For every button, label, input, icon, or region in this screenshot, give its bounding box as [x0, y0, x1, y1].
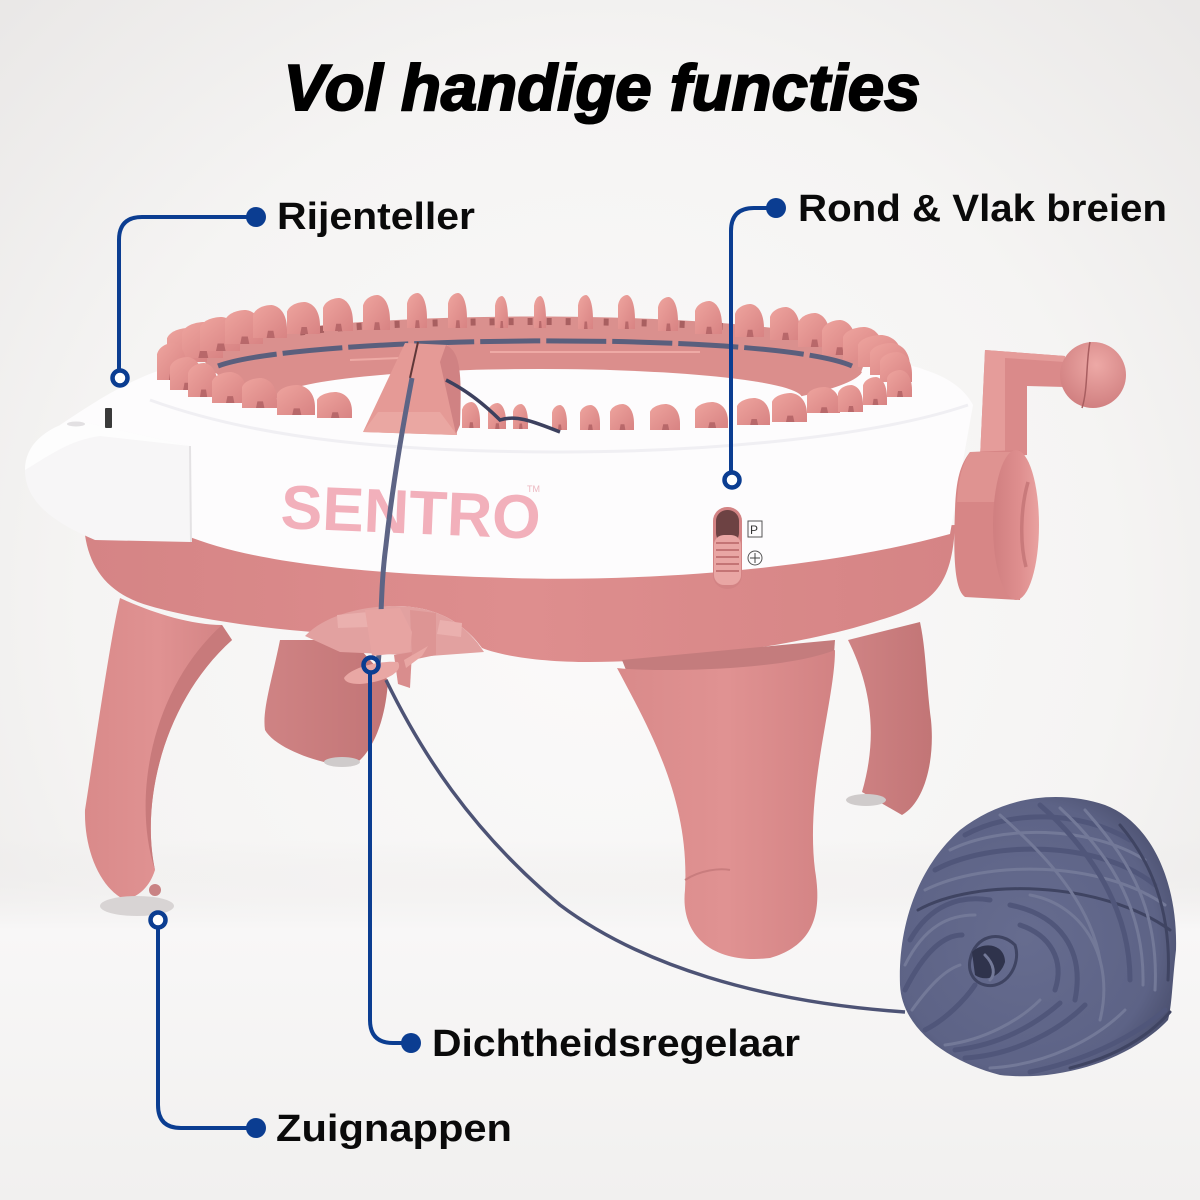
front row of pink needles — [157, 343, 912, 430]
callout: Dichtheidsregelaar: Dichtheidsregelaar — [432, 1023, 800, 1065]
callout: Zuignappen: Zuignappen — [276, 1108, 512, 1150]
yarn strand down the front — [378, 378, 412, 665]
back left leg — [264, 640, 388, 766]
back right leg — [848, 622, 932, 815]
back left suction cup — [324, 757, 360, 767]
callout: Rijenteller — [112, 196, 475, 386]
mode slider switch — [713, 507, 742, 589]
front right leg — [617, 640, 835, 959]
brand logo: TM — [527, 484, 540, 494]
callout: Zuignappen — [150, 912, 512, 1150]
pink machine base — [85, 525, 955, 662]
long yarn strand to the ball — [386, 680, 905, 1012]
tension regulator — [337, 608, 462, 688]
back right suction cup — [846, 794, 886, 806]
tension dial recess — [305, 606, 484, 656]
crank handle — [980, 342, 1126, 458]
white machine body — [60, 350, 973, 579]
callout: Rond & Vlak breien: Rond & Vlak breien — [798, 188, 1167, 230]
yarn guide cone — [363, 342, 461, 435]
back row of pink needles — [167, 293, 912, 382]
inner ring — [215, 341, 862, 427]
title: Vol handige functies — [284, 51, 920, 124]
brand logo: SENTRO — [279, 473, 542, 553]
front left leg — [85, 598, 232, 900]
row counter housing — [25, 408, 191, 542]
front left suction cup — [100, 884, 174, 916]
callout: Rijenteller: Rijenteller — [277, 196, 475, 238]
callout: Rond & Vlak breien — [724, 188, 1167, 488]
crank gear housing — [954, 450, 1039, 600]
ball of yarn — [900, 797, 1176, 1076]
callout: Dichtheidsregelaar — [364, 658, 800, 1065]
mode icons — [748, 521, 762, 565]
yarn from guide to needles — [446, 380, 560, 432]
mode icons: P — [750, 523, 758, 537]
